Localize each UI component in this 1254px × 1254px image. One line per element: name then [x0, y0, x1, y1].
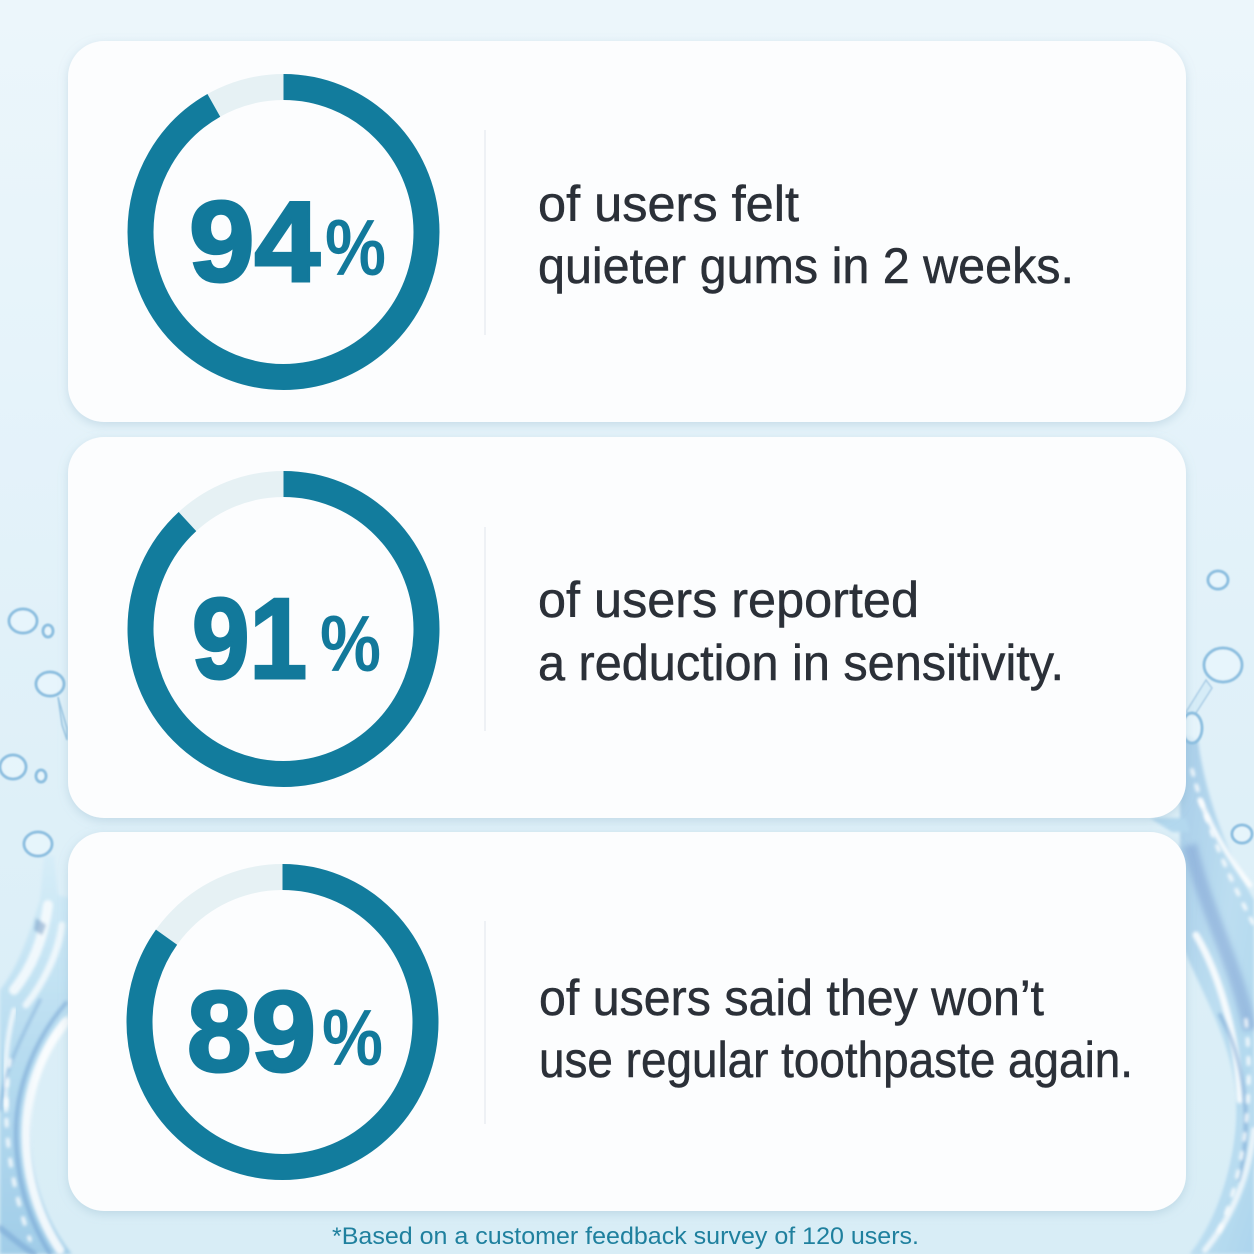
text: 89% description: use regular toothpaste again. [539, 1032, 1133, 1088]
value: 91% [192, 576, 381, 703]
text: 94% description [538, 176, 1074, 294]
value: 94%: % [325, 203, 386, 292]
text: 89% description [539, 970, 1133, 1088]
droplets left [0, 609, 67, 856]
text: 91% description: of users reported [538, 572, 919, 628]
text: 91% description [538, 572, 1064, 691]
water splash: left [0, 609, 72, 1254]
value: 89%: % [322, 993, 383, 1082]
value: 89%: 89 [187, 969, 316, 1096]
panel: 89% stat [68, 832, 1186, 1211]
panel: 91% stat [68, 437, 1186, 818]
droplets right [1182, 571, 1252, 843]
footnote: *Based on a customer feedback survey of 120 users. [332, 1223, 919, 1250]
ring chart: 94% [140, 87, 426, 377]
text: 89% description: of users said they won’t [539, 970, 1044, 1026]
value: 94% [189, 179, 386, 306]
water splash: right [1150, 571, 1254, 1254]
panel: 94% stat [68, 41, 1186, 422]
value: 94%: 94 [189, 179, 320, 306]
value: 89% [187, 969, 383, 1096]
text: 91% description: a reduction in sensitivity. [538, 635, 1064, 691]
ring chart: 91% [140, 484, 426, 774]
text: 94% description: of users felt [538, 176, 799, 232]
text: 94% description: quieter gums in 2 weeks. [538, 238, 1074, 294]
value: 91%: % [320, 599, 381, 688]
value: 91%: 91 [192, 576, 307, 703]
ring chart: 89% [140, 877, 426, 1167]
